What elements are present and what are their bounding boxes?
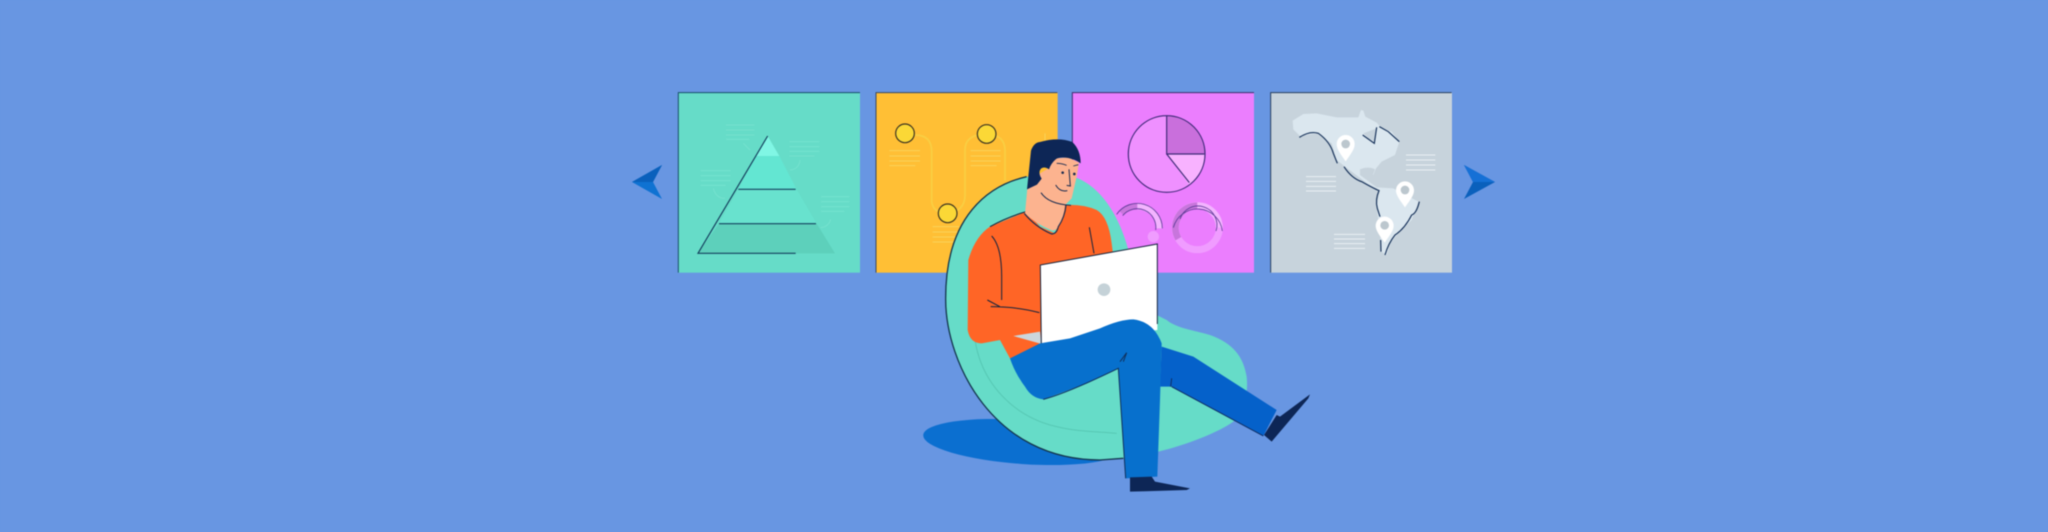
pie chart: [1128, 116, 1205, 192]
panel: pie and donut charts: [1072, 93, 1254, 273]
arrow: previous: [632, 165, 662, 199]
hair: [1027, 139, 1081, 189]
panel: map: [1271, 93, 1452, 273]
sweater torso: [968, 205, 1113, 358]
map pins: [1337, 135, 1414, 243]
far shoe: [1264, 394, 1310, 442]
floor shadow: [922, 413, 1124, 471]
arrow: next: [1464, 165, 1495, 199]
coastlines: [1299, 127, 1419, 255]
node circles: [896, 124, 996, 223]
panel: pyramid chart: [678, 93, 860, 273]
neck and face: [1024, 139, 1081, 234]
panel: flow diagram: [876, 93, 1058, 273]
beanbag chair: [946, 177, 1247, 460]
near shoe: [1130, 477, 1190, 492]
person on beanbag: [946, 139, 1310, 492]
laptop: [1013, 244, 1157, 344]
far leg: [1160, 347, 1277, 436]
facial features: [1024, 163, 1078, 234]
donut left: [1117, 203, 1162, 242]
donut right: [1173, 206, 1222, 250]
americas landmass: [1293, 110, 1418, 255]
near leg: [1010, 319, 1162, 478]
